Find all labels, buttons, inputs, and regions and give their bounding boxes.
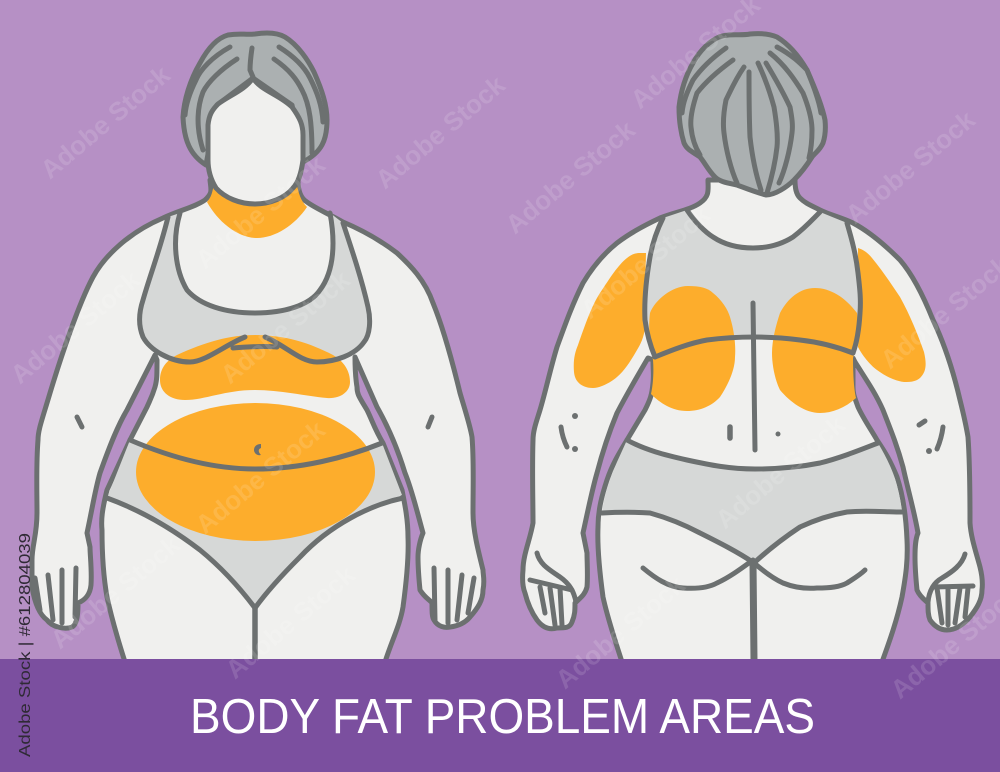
back hair xyxy=(679,34,825,195)
watermarks: Adobe Stock xyxy=(45,529,186,655)
hotspot: upper abdomen xyxy=(160,335,350,400)
hotspot: neck xyxy=(207,186,307,238)
front bra fill xyxy=(140,213,370,362)
front hair xyxy=(183,33,327,165)
title band xyxy=(0,659,1000,772)
hotspot: left back xyxy=(649,286,735,411)
watermarks: Adobe Stock xyxy=(190,149,331,275)
watermarks: Adobe Stock xyxy=(370,69,511,195)
navel xyxy=(254,444,261,455)
title: BODY FAT PROBLEM AREAS xyxy=(190,690,815,744)
watermarks: Adobe Stock xyxy=(575,199,716,325)
front briefs fill xyxy=(107,440,402,608)
hotspot: lower abdomen xyxy=(136,403,375,541)
front face xyxy=(208,78,303,204)
figure: front view xyxy=(32,33,484,662)
stock credit: Adobe Stock | #612804039 xyxy=(17,533,34,757)
watermarks: Adobe Stock xyxy=(35,59,176,185)
watermarks: Adobe Stock xyxy=(220,559,361,685)
hotspot: right back xyxy=(772,288,858,413)
watermarks: Adobe Stock xyxy=(840,104,981,230)
back hair strands xyxy=(682,47,821,193)
front body silhouette xyxy=(32,180,484,662)
watermarks: Adobe Stock xyxy=(550,569,691,695)
watermarks: Adobe Stock xyxy=(500,114,641,240)
front garment lines xyxy=(35,213,474,660)
back body silhouette xyxy=(523,180,982,662)
watermarks: Adobe Stock xyxy=(710,409,851,535)
figure: back view xyxy=(523,34,982,662)
watermarks: Adobe Stock xyxy=(5,264,146,390)
back lines xyxy=(530,210,973,660)
back top fill xyxy=(645,210,860,357)
hotspot: left upper arm xyxy=(574,253,646,388)
watermarks: Adobe Stock xyxy=(215,264,356,390)
back briefs fill xyxy=(602,440,902,563)
back skin dots xyxy=(572,413,932,454)
watermarks: Adobe Stock xyxy=(190,414,331,540)
front hair strands xyxy=(185,47,323,153)
hotspot: right upper arm xyxy=(858,248,926,382)
